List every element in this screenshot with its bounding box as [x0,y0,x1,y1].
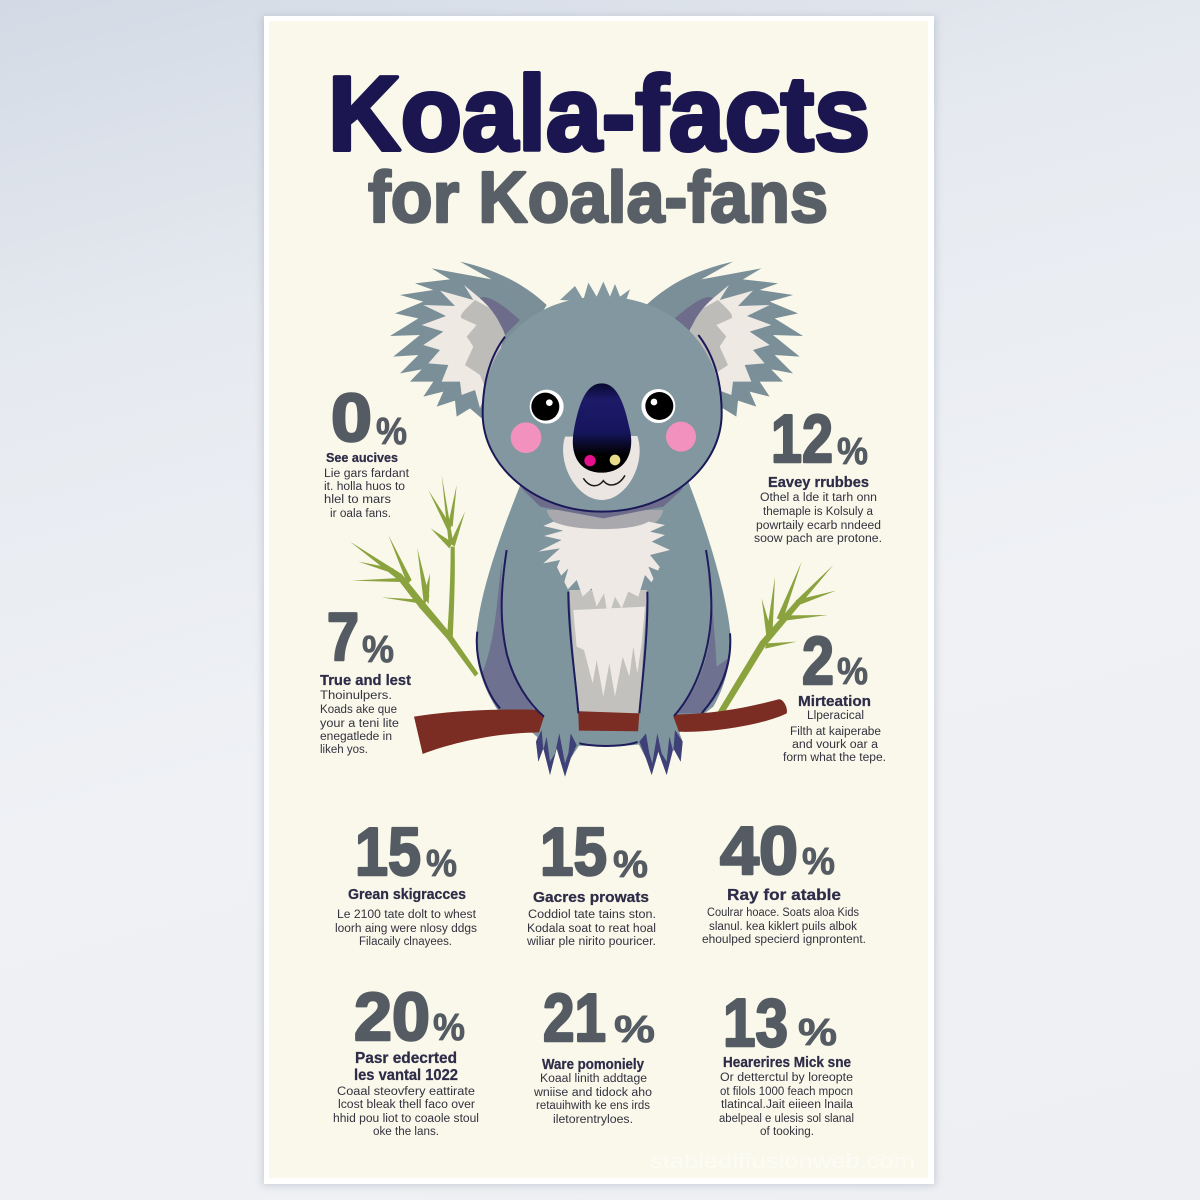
description: Or detterctul by loreopte [720,1072,853,1084]
number: 7 [327,599,359,675]
description [333,1086,479,1138]
stat: 13% [719,985,854,1138]
koala illustration [390,262,803,777]
percent sign: % [802,841,835,883]
subtitle: for Koala-fans [368,158,828,238]
description [754,492,882,545]
description [320,690,399,756]
stat: 7% [320,599,411,756]
description [702,907,866,946]
left nostril [584,455,596,466]
claws shading [536,730,577,777]
description: retauihwith ke ens irds [536,1100,650,1112]
icon: right eucalyptus sprig [717,562,836,714]
description: it. holla huos to [324,481,405,493]
left ear [390,262,547,418]
description [719,1072,854,1138]
stat: 12% [754,401,882,545]
right arm [637,567,712,775]
description: Koads ake que [320,704,397,716]
left eye [530,390,564,424]
description: Filacaily clnayees. [359,936,452,948]
percent sign: % [837,431,868,473]
muzzle [563,436,640,500]
stat: 20% [333,979,479,1138]
number: 15 [355,814,421,890]
right eye [641,389,675,423]
right nostril [610,455,620,465]
heading [354,1050,458,1084]
number: 15 [540,814,607,890]
percent sign: % [376,411,407,453]
chest fur [538,522,670,618]
description: and vourk oar a [792,739,879,751]
description [533,1073,652,1126]
description [783,710,886,764]
heading: Pasr edecrted [355,1050,457,1067]
neck shadow and chest band [547,510,663,533]
description: Lie gars fardant [324,468,410,480]
description: your a teni lite [320,718,399,730]
belly [569,590,647,713]
percent sign: % [798,1012,837,1054]
description: wiliar ple nirito pouricer. [526,936,656,948]
icon: left eucalyptus sprig [350,475,478,677]
head fur tuft [560,282,630,303]
description: likeh yos. [320,744,368,756]
description: Coulrar hoace. Soats aloa Kids [707,907,859,919]
description: Coddiol tate tains ston. [528,909,656,921]
head outline [483,335,722,512]
description: ir oala fans. [330,508,391,520]
description: Coaal steovfery eattirate [337,1086,475,1098]
description: oke the lans. [373,1126,439,1138]
koala head [483,282,722,518]
stat: 15% centre [526,814,656,948]
heading: See aucives [326,450,398,465]
heading: Eavey rrubbes [768,475,869,491]
watermark: stablediffusionweb.com [650,1151,915,1173]
description: lcost bleak thell faco over [338,1099,475,1111]
description: hhid pou liot to coaole stoul [333,1113,479,1125]
description: Kodala soat to reat hoal [527,923,656,935]
stat: 15% left [335,814,477,948]
heading: Grean skigracces [348,887,466,903]
number: 13 [723,985,788,1061]
stat: 40% [702,813,866,946]
description [526,909,656,948]
description: Othel a lde it tarh onn [760,492,877,504]
heading: True and lest [320,673,411,689]
heading: Hearerires Mick sne [723,1055,851,1071]
description: ot filols 1000 feach mpocn [720,1086,853,1098]
description: iletorentryloes. [553,1114,633,1126]
number: 12 [771,401,833,477]
right cheek [666,422,696,452]
description [324,468,410,520]
description: Filth at kaiperabe [790,726,881,738]
heading: Ray for atable [727,887,841,904]
right ear [646,262,803,418]
percent sign: % [837,651,868,693]
description: ehoulped specierd ignprontent. [702,934,866,946]
title: Koala-facts [328,55,870,173]
description: soow pach are protone. [754,533,882,545]
number: 0 [331,380,372,456]
poster frame [264,16,934,1184]
arm outlines [502,550,711,717]
heading: Gacres prowats [533,890,649,906]
description: slanul. kea kiklert puils albok [709,921,857,933]
description: hlel to mars [324,494,391,506]
heading: les vantal 1022 [354,1067,458,1084]
left cheek [511,422,541,453]
description: wniise and tidock aho [533,1087,652,1099]
koala body [414,473,787,777]
description: Llperacical [807,710,864,722]
percent sign: % [613,844,648,886]
nose [573,383,631,473]
description: themaple is Kolsuly a [763,506,874,518]
description [335,909,477,948]
percent sign: % [426,843,457,885]
percent sign: % [433,1007,465,1049]
description: Koaal linith addtage [540,1073,647,1085]
left arm [502,567,579,777]
heading: Ware pomoniely [542,1057,644,1073]
stat: 0% [324,380,410,520]
stat: 2% [783,623,886,764]
number: 2 [802,623,834,699]
stat: 21% [533,980,655,1126]
percent sign: % [362,629,394,671]
description: abelpeal e ulesis sol slanal [719,1113,854,1125]
description: Le 2100 tate dolt to whest [337,909,477,921]
mouth [583,475,625,486]
description: tlatincal.Jait eiieen lnaila [721,1099,854,1111]
heading: Mirteation [798,694,871,710]
description: loorh aing were nlosy ddgs [335,923,477,935]
number: 20 [354,979,430,1055]
description: form what the tepe. [783,752,886,764]
description: Thoinulpers. [320,690,392,702]
percent sign: % [614,1009,655,1051]
number: 40 [720,813,798,889]
number: 21 [543,980,606,1056]
description: enegatlede in [320,731,392,743]
description: of tooking. [760,1126,814,1138]
description: powrtaily ecarb nndeed [756,520,881,532]
branch [414,699,787,754]
